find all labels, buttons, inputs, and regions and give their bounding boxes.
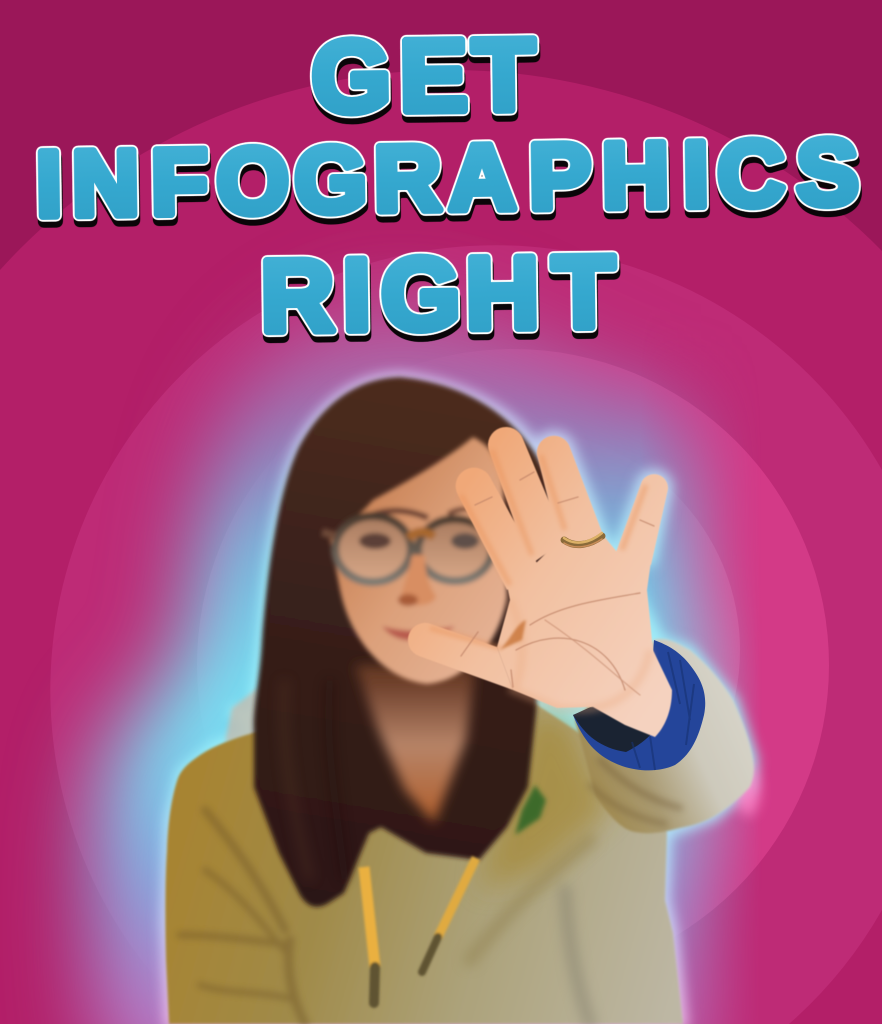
drawstring: left [364,867,375,1003]
sleeve [575,639,754,833]
hair [254,377,552,907]
eyebrows [372,511,428,518]
drawstring: right [422,858,476,972]
nose shadow [398,594,418,606]
cuff ribs [632,652,694,770]
little finger [615,474,668,565]
title line: RIGHT: RIGHT [260,235,616,353]
ring [564,533,602,547]
sweater [165,700,683,1024]
mouth [382,626,455,641]
background circle: inner [300,430,740,870]
palm shading [510,600,650,710]
person [165,377,754,1024]
sweater folds [180,810,305,1024]
hand [408,427,672,737]
shoulder fuzz [225,688,262,742]
glasses bridge [408,532,434,538]
title line: INFOGRAPHICS: INFOGRAPHICS [35,120,859,236]
mustard chest shading [480,710,610,890]
palm shadow near thumb [500,620,526,650]
neck [355,665,475,823]
title line: GET: GET [311,17,536,134]
index finger [456,468,538,590]
sleeve folds [590,760,680,824]
palm creases [461,472,654,695]
green logo [515,785,546,835]
sleeve cuff [573,640,705,770]
cuff inner shadow [573,680,668,752]
glasses [335,516,492,582]
ring finger [537,436,605,545]
nose [401,555,436,605]
person glow [165,377,760,1024]
background circle: third [197,349,829,981]
face [322,437,507,684]
hair strands [284,680,345,880]
finger shading [430,450,646,648]
middle finger [488,427,565,565]
thumb [408,623,513,690]
background circle: second [50,245,882,1024]
palm [497,535,672,737]
grey folds [470,840,590,1024]
eyes [359,533,391,549]
title [35,17,859,353]
